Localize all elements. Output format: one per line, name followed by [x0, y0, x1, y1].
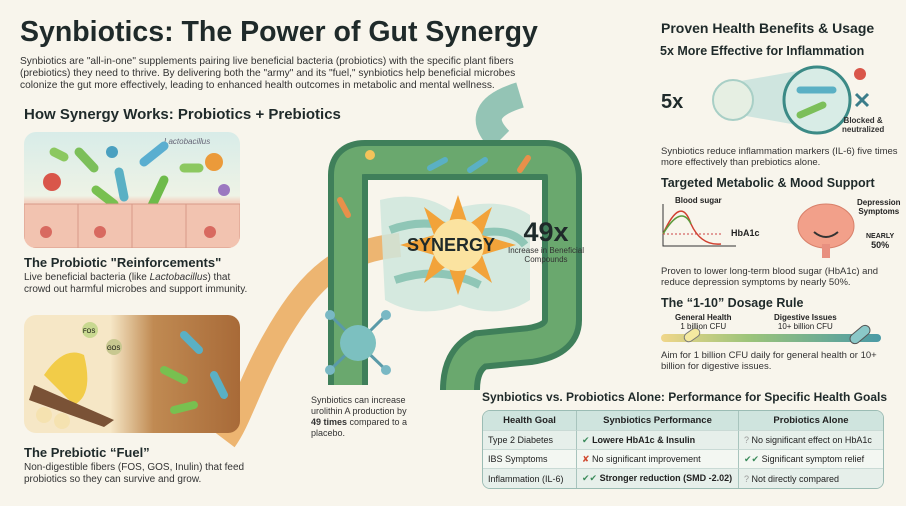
panel: probiotic illustration — [24, 132, 240, 248]
panel: prebiotic illustration — [24, 315, 240, 433]
section: inflammation: 5x More Effective for Inflammation — [660, 44, 864, 58]
text: prebiotic fuel: Non-digestible fibers (FOS, GOS, Inulin) that feed probiotics so they can survive and grow. — [24, 462, 244, 485]
table: comparison: Probiotics Alone — [773, 415, 849, 426]
section: dosage rule — [661, 296, 881, 344]
table: comparison: ✔ Lowere HbA1c & Insulin — [582, 434, 695, 444]
table: comparison: Synbiotics Performance — [603, 415, 712, 426]
section: metabolic mood — [661, 176, 901, 258]
section: inflammation: 5x — [661, 91, 683, 113]
section: metabolic mood: Symptoms — [858, 207, 899, 216]
table: comparison: Inflammation (IL-6) — [488, 474, 564, 484]
section: metabolic mood: Depression — [857, 198, 901, 207]
section: metabolic mood: Blood sugar — [675, 196, 722, 205]
text: prebiotic fuel: The Prebiotic “Fuel” — [24, 445, 150, 460]
icon: synergy burst: SYNERGY — [407, 235, 495, 255]
section: inflammation: Blocked & — [844, 116, 883, 125]
heading: proven benefits: Proven Health Benefits & Usage — [661, 20, 874, 36]
text: probiotic reinforcements: The Probiotic "Reinforcements" — [24, 255, 221, 270]
icon: molecule — [325, 310, 391, 375]
title: Synbiotics: The Power of Gut Synergy — [20, 16, 538, 48]
section: dosage rule: General Health — [675, 313, 731, 322]
text: probiotic reinforcements — [24, 255, 247, 295]
text: probiotic reinforcements: Live beneficial bacteria (like Lactobacillus) that crowd out harmful microbes and support immunity. — [24, 272, 247, 295]
heading: how synergy works: How Synergy Works: Probiotics + Prebiotics — [24, 106, 341, 123]
text: metabolic: Proven to lower long-term blood sugar (HbA1c) and reduce depression symptoms by nearly 50%. — [661, 266, 878, 288]
table: comparison: Health Goal — [503, 415, 556, 426]
section: metabolic mood: NEARLY — [866, 233, 894, 240]
intro text: Synbiotics are "all-in-one" supplements pairing live beneficial bacteria (probiotics) with the specific plant fibers (prebiotics) they need to thrive. By delivering both the "army" and its "fuel," synbiotics help beneficial microbes colonize the gut more effectively, leading to enhanced health outcomes in metabolic and mental wellness. — [20, 56, 515, 91]
section: inflammation — [660, 44, 884, 134]
section: metabolic mood: Targeted Metabolic & Mood Support — [661, 176, 875, 190]
panel: prebiotic illustration: GOS — [107, 346, 120, 352]
section: dosage rule: 1 billion CFU — [680, 322, 726, 331]
stat: 49x: Increase in Beneficial Compounds — [508, 246, 584, 264]
table: comparison: ? No significant effect on HbA1c — [744, 435, 872, 445]
table: comparison: IBS Symptoms — [488, 454, 548, 464]
stat: 49x — [508, 217, 584, 264]
stat: 49x: 49x — [523, 217, 569, 247]
icon: synergy burst — [400, 195, 516, 295]
section: dosage rule: Digestive Issues — [774, 313, 837, 322]
table: comparison: ✘ No significant improvement — [582, 454, 701, 464]
table: comparison: ✔✔ Stronger reduction (SMD -2.02) — [582, 473, 732, 483]
panel: prebiotic illustration: FOS — [83, 329, 95, 335]
table: comparison: ? Not directly compared — [744, 474, 839, 484]
section: inflammation: neutralized — [842, 125, 884, 134]
text: dosage: Aim for 1 billion CFU daily for general health or 10+ billion for digestive issues. — [661, 350, 877, 372]
table: comparison: Type 2 Diabetes — [488, 435, 553, 445]
text: inflammation: Synbiotics reduce inflammation markers (IL-6) five times more effectively than prebiotics alone. — [661, 146, 898, 168]
section: metabolic mood: HbA1c — [731, 228, 760, 238]
heading: table: Synbiotics vs. Probiotics Alone: Performance for Specific Health Goals — [482, 390, 887, 404]
text: urolithin: Synbiotics can increase urolithin A production by 49 times compared to a placebo. — [311, 395, 407, 438]
table: comparison: ✔✔ Significant symptom relief — [744, 454, 864, 464]
table: comparison — [482, 410, 884, 489]
text: prebiotic fuel — [24, 445, 244, 485]
section: metabolic mood: 50% — [871, 240, 889, 250]
panel: probiotic illustration: Lactobacillus — [164, 137, 210, 146]
section: dosage rule: 10+ billion CFU — [778, 322, 833, 331]
section: dosage rule: The “1-10” Dosage Rule — [661, 296, 803, 310]
